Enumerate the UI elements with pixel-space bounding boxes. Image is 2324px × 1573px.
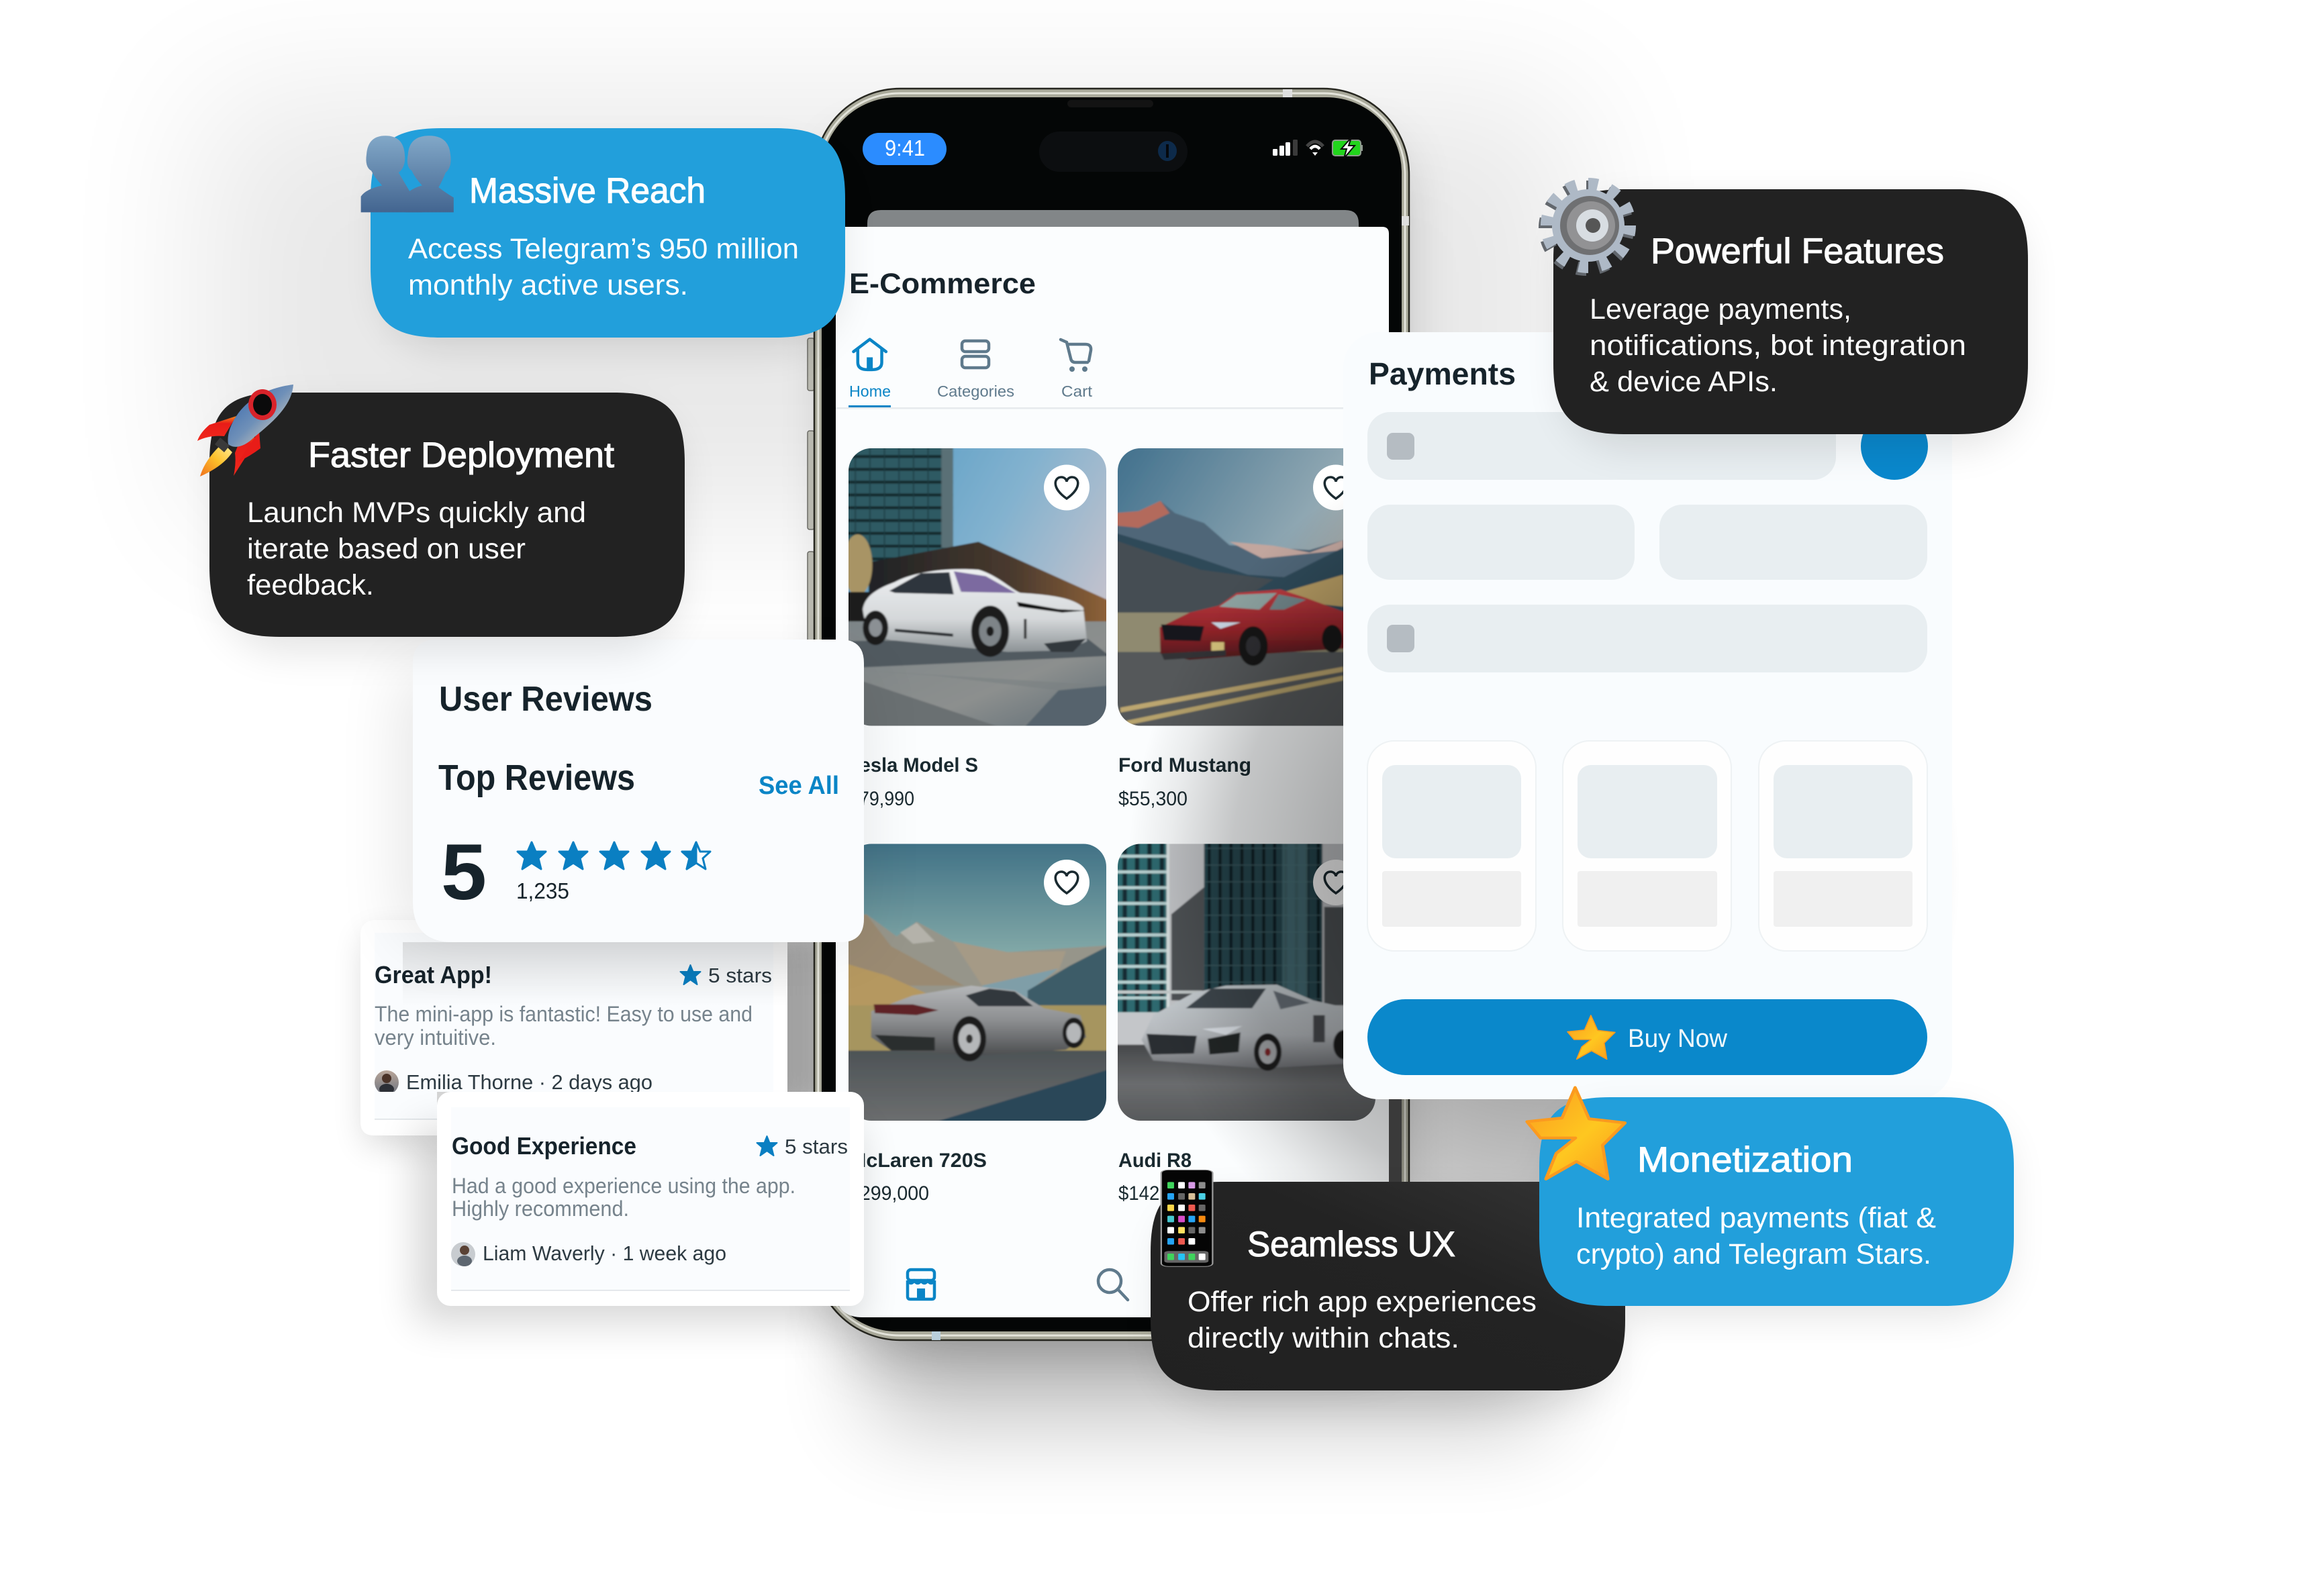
product labels: $142,700 <box>1118 1182 1196 1205</box>
callout: Monetization <box>1527 1088 2014 1306</box>
panel: User Reviews <box>413 640 864 942</box>
input row 1 <box>1367 412 1836 480</box>
callout text: iterate based on user <box>247 533 526 565</box>
author: Liam Waverly · 1 week ago <box>483 1241 726 1265</box>
icon: gear <box>1545 185 1629 269</box>
status time pill <box>863 133 947 165</box>
rating: 5 stars <box>708 964 772 987</box>
icon: small star <box>1567 1015 1615 1059</box>
review body: The mini-app is fantastic! Easy to use and <box>375 1002 753 1026</box>
option card 3 <box>1759 741 1927 951</box>
author: Emilia Thorne · 2 days ago <box>406 1070 652 1094</box>
review card outer shadow <box>366 936 782 1144</box>
callout heading: Monetization <box>1637 1140 1853 1180</box>
heading: Payments: Payments <box>1369 356 1516 391</box>
heading: Top Reviews: Top Reviews <box>438 758 635 798</box>
gray sheet tab <box>867 210 1359 228</box>
tab label: Home: Home <box>849 383 891 400</box>
icon: home <box>853 340 886 370</box>
tab bar <box>836 340 1353 409</box>
callout: Massive Reach <box>361 128 845 338</box>
callout text: crypto) and Telegram Stars. <box>1576 1238 1931 1270</box>
callout text: feedback. <box>247 569 374 601</box>
review count: 1,235 <box>516 878 569 903</box>
callout text: Access Telegram’s 950 million <box>408 233 799 265</box>
status icons <box>1273 138 1363 158</box>
product image: silver Audi <box>1115 840 1379 1123</box>
heading: User Reviews: User Reviews <box>439 680 652 719</box>
callout text: Offer rich app experiences <box>1188 1286 1537 1318</box>
link: See All: See All <box>759 772 839 800</box>
phone <box>808 89 1409 1340</box>
callout text <box>408 233 799 301</box>
callout text <box>1576 1202 1936 1270</box>
input row 2 <box>1367 505 1927 580</box>
icon: search <box>1098 1270 1128 1300</box>
review body: Highly recommend. <box>452 1197 629 1221</box>
callout: Seamless UX <box>1151 1170 1625 1390</box>
heading: E-Commerce: E-Commerce <box>849 268 1036 300</box>
callout: Faster Deployment <box>197 385 685 637</box>
tab label: Categories: Categories <box>937 383 1014 400</box>
callout text: & device APIs. <box>1590 366 1778 398</box>
status time pill: 9:41 <box>885 136 925 160</box>
rating <box>757 1135 848 1158</box>
callout text <box>1188 1286 1537 1354</box>
callout heading: Faster Deployment <box>308 436 614 475</box>
callout text <box>247 497 586 601</box>
product labels: Tesla Model S <box>849 754 978 776</box>
phone frame <box>814 89 1409 1340</box>
star rating <box>518 842 710 869</box>
icon: categories <box>962 341 989 368</box>
review body: Had a good experience using the app. <box>452 1174 795 1198</box>
option card 2 <box>1563 741 1731 951</box>
ambient shadows <box>201 94 1578 1423</box>
callout text: Integrated payments (fiat & <box>1576 1202 1936 1234</box>
product image: white sedan <box>843 444 1110 729</box>
callout heading: Massive Reach <box>469 171 706 211</box>
review body <box>452 1174 795 1221</box>
product labels: $299,000 <box>849 1182 929 1205</box>
bezel below payments <box>1389 1099 1402 1182</box>
review heading: Great App! <box>375 961 492 988</box>
rating: 5 stars <box>785 1135 848 1158</box>
rating <box>681 964 772 987</box>
icon: busts <box>361 136 454 212</box>
callout text <box>1590 293 1966 398</box>
review card lower remainder <box>360 1092 437 1135</box>
callout text: monthly active users. <box>408 269 688 301</box>
product labels: Ford Mustang <box>1118 754 1251 776</box>
earpiece speaker <box>1067 100 1153 107</box>
review body <box>375 1002 753 1050</box>
callout text: Launch MVPs quickly and <box>247 497 586 529</box>
input row 3 <box>1367 605 1927 672</box>
callout text: Leverage payments, <box>1590 293 1851 325</box>
icon: rocket <box>197 385 293 476</box>
payments card shadow <box>1128 436 1960 1309</box>
callout heading: Powerful Features <box>1651 232 1944 271</box>
tab label: Cart: Cart <box>1061 383 1093 400</box>
option card 1 <box>1367 741 1536 951</box>
dynamic island <box>1039 132 1188 172</box>
product image: silver McLaren <box>846 840 1110 1123</box>
callout: Powerful Features <box>1545 185 2028 434</box>
review body: very intuitive. <box>375 1025 496 1050</box>
callout text: notifications, bot integration <box>1590 329 1966 362</box>
callout text: directly within chats. <box>1188 1322 1459 1354</box>
shadows of reviews cards <box>403 671 859 1322</box>
product labels: $55,300 <box>1118 788 1188 810</box>
button label: Buy Now <box>1628 1025 1728 1053</box>
icon: star <box>1527 1088 1625 1179</box>
buy now button <box>1367 999 1927 1075</box>
product labels: $79,990 <box>849 788 914 810</box>
panel: review Good Experience <box>437 1092 864 1306</box>
heart buttons <box>1044 464 1359 905</box>
rating score: 5 <box>441 828 487 917</box>
pill shadows <box>222 151 2021 1403</box>
callout heading: Seamless UX <box>1247 1225 1455 1264</box>
phone black bezel <box>822 97 1402 1331</box>
phone side buttons <box>808 338 814 650</box>
product labels <box>849 754 1251 1205</box>
panel: review Great App <box>360 920 787 1135</box>
icon: store <box>908 1270 934 1299</box>
product labels: McLaren 720S <box>849 1150 987 1172</box>
icon: phone apps <box>1161 1170 1212 1266</box>
blue circle button <box>1861 413 1928 480</box>
review heading: Good Experience <box>452 1132 636 1160</box>
product labels: Audi R8 <box>1118 1150 1192 1172</box>
panel: payments <box>1343 332 1952 1099</box>
phone screen <box>836 227 1389 1317</box>
product image: red Mustang <box>1118 448 1343 726</box>
icon: cart <box>1061 340 1091 372</box>
